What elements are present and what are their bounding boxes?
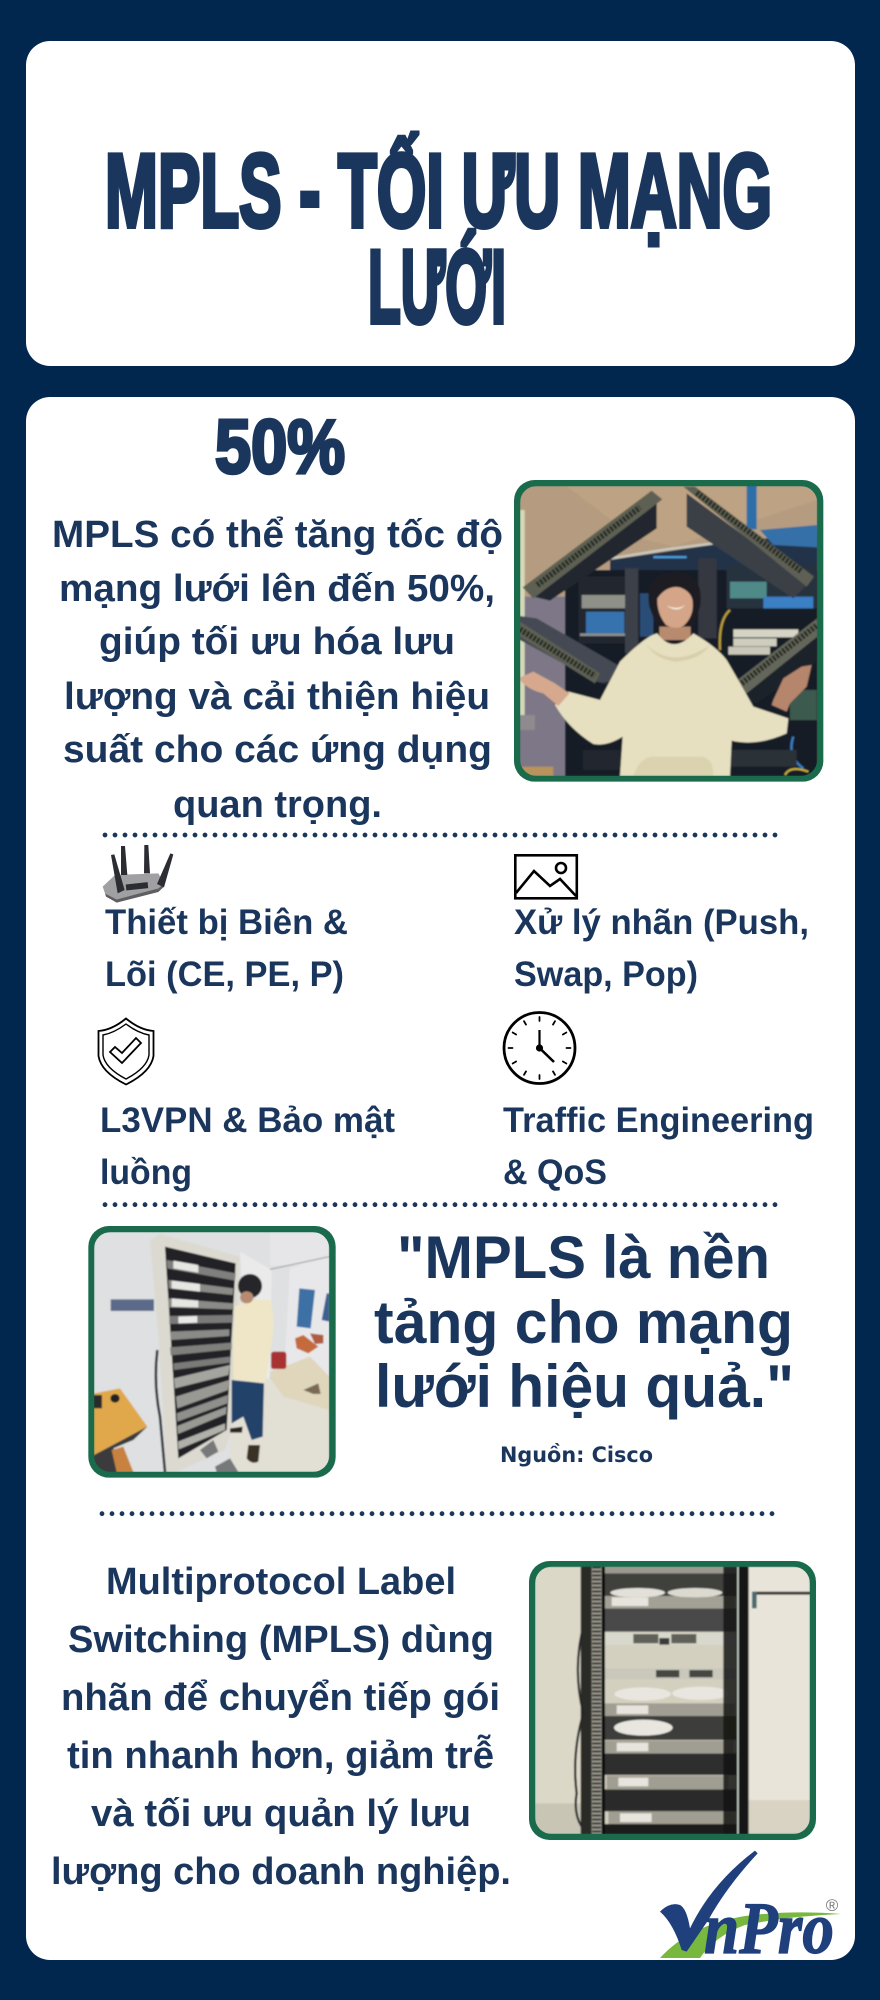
photo: engineer at server rack <box>88 1226 336 1478</box>
feature label <box>105 903 348 994</box>
person <box>658 625 692 642</box>
photo: engineer with floating switches <box>514 480 823 782</box>
icon: router <box>103 845 173 903</box>
title: LƯỚI <box>368 230 506 346</box>
text block: MPLS definition: Multiprotocol Label <box>106 1561 456 1603</box>
logo swoosh <box>660 1912 841 1958</box>
quote <box>374 1224 794 1420</box>
feature label: Xử lý nhãn (Push, <box>514 903 809 942</box>
text block: MPLS definition: tin nhanh hơn, giảm trễ <box>67 1733 494 1777</box>
icon: image frame <box>515 855 577 898</box>
logo check mark <box>660 1851 758 1952</box>
feature label <box>100 1101 395 1192</box>
feature label <box>503 1101 814 1192</box>
switches <box>533 503 657 601</box>
feature: traffic engineering <box>503 1012 814 1192</box>
text block: MPLS definition: nhãn để chuyển tiếp gói <box>61 1677 500 1719</box>
text block: MPLS speed description: suất cho các ứng dụng <box>63 729 492 771</box>
text block: MPLS speed description: lượng và cải thiện hiệu <box>64 676 490 718</box>
icon: clock <box>504 1012 575 1084</box>
panel: main content card <box>26 397 855 1970</box>
feature: label processing <box>514 855 809 994</box>
text block: MPLS definition: lượng cho doanh nghiệp. <box>51 1851 511 1893</box>
text block: MPLS speed description: mạng lưới lên đến 50%, <box>59 568 495 610</box>
feature label: L3VPN & Bảo mật <box>100 1101 395 1140</box>
logo registered mark: ® <box>826 1896 839 1915</box>
panel: title card <box>26 41 855 366</box>
feature label: Thiết bị Biên & <box>105 903 348 942</box>
divider <box>105 833 776 837</box>
text block: MPLS speed description: quan trọng. <box>173 784 382 826</box>
text block: MPLS speed description: MPLS có thể tăng tốc độ <box>52 514 503 556</box>
quote source: Nguồn: Cisco <box>500 1443 653 1467</box>
title <box>105 134 772 346</box>
feature label: & QoS <box>503 1153 607 1192</box>
photo: network rack <box>529 1561 816 1840</box>
feature label: Traffic Engineering <box>503 1101 814 1140</box>
text block: MPLS definition: Switching (MPLS) dùng <box>68 1619 494 1661</box>
quote: lưới hiệu quả." <box>375 1353 794 1420</box>
quote: "MPLS là nền <box>397 1224 770 1291</box>
feature label: Lõi (CE, PE, P) <box>105 955 344 994</box>
feature: L3VPN and security <box>98 1018 395 1192</box>
feature label <box>514 903 809 994</box>
divider <box>102 1511 773 1516</box>
quote: tảng cho mạng <box>374 1289 793 1356</box>
feature: edge and core devices <box>103 845 348 994</box>
feature label: Swap, Pop) <box>514 955 698 994</box>
feature label: luồng <box>100 1153 192 1192</box>
icon: shield with check <box>98 1018 154 1084</box>
text block: MPLS speed description: giúp tối ưu hóa lưu <box>99 621 455 663</box>
logo wordmark: nPro <box>704 1888 834 1970</box>
logo: VnPro <box>660 1851 841 1970</box>
text block: MPLS speed description <box>52 514 503 826</box>
text block: MPLS definition: và tối ưu quản lý lưu <box>91 1793 471 1835</box>
divider <box>105 1202 776 1207</box>
text block: MPLS definition <box>51 1561 511 1893</box>
statistic: 50%: 50% <box>215 405 345 490</box>
